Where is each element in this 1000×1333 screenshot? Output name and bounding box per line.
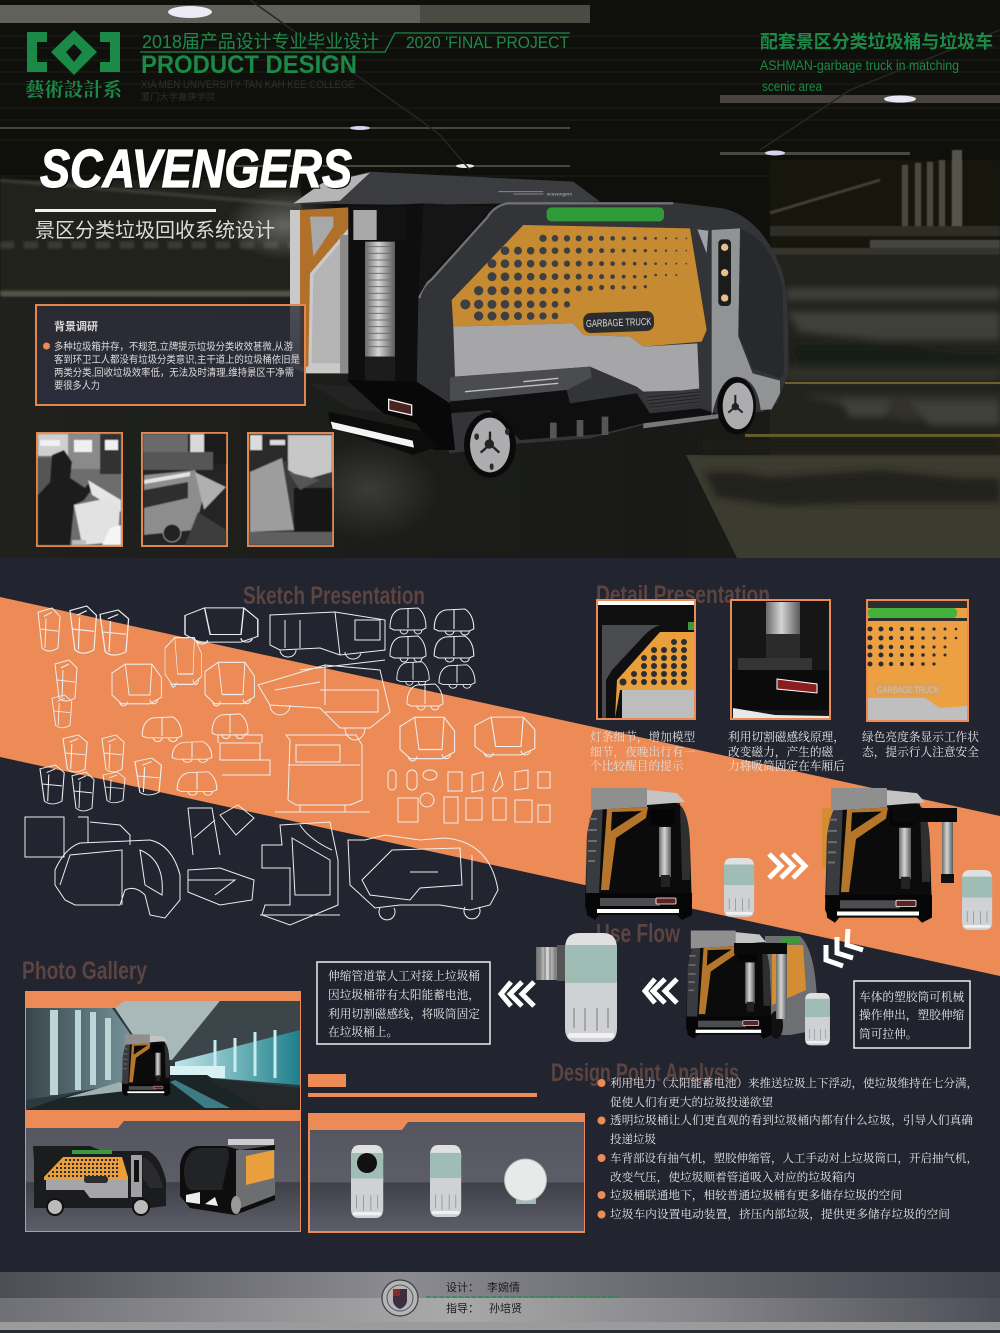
caption: magnetic tube detail <box>728 730 845 773</box>
header right: companion product title: 配套景区分类垃圾桶与垃圾车 <box>760 31 993 52</box>
panel: photo gallery <box>25 991 301 1232</box>
gallery photo: truck side and front views <box>26 1121 300 1231</box>
use flow step 1: truck and bin <box>585 788 754 920</box>
callout: plastic tube extends <box>854 981 970 1048</box>
main truck illustration: scavengers <box>547 191 573 197</box>
caption: light strip detail: 灯条细节，增加模型 <box>590 730 696 744</box>
arrow: to step 4 <box>645 979 677 1003</box>
photo: cart on street <box>142 433 227 546</box>
use flow step 4: bin with docked tube <box>536 933 617 1042</box>
caption: magnetic tube detail: 利用切割磁感线原理， <box>728 730 845 744</box>
heading: sketch presentation: Sketch Presentation <box>243 582 425 610</box>
header: course and project title: XIA MEN UNIVERSITY TAN KAH KEE COLLEGE <box>141 79 355 91</box>
panel: background research: 两类分类,回收垃圾效率低，无法及时清理,维持景区干净需 <box>54 366 294 379</box>
design points list <box>598 1076 978 1221</box>
detail image: light strip <box>597 600 695 719</box>
header: course and project title: 厦门大学嘉庚学院 <box>141 91 215 102</box>
caption: light strip detail: 个比较醒目的提示 <box>590 759 684 773</box>
arrow: to step 2 <box>769 854 805 878</box>
subtitle with rule <box>35 209 275 242</box>
callout: plastic tube extends: 车体的塑胶筒可机械 <box>859 990 965 1004</box>
callout: telescopic pipe docks: 伸缩管道靠人工对接上垃圾桶 <box>328 969 480 983</box>
hero background: underground car park <box>0 0 1000 558</box>
callout: telescopic pipe docks: 因垃圾桶带有太阳能蓄电池， <box>328 988 480 1002</box>
heading: use flow: Use Flow <box>596 918 681 948</box>
use flow step 3: truck docking bin <box>686 930 830 1045</box>
arrow: to step 3 <box>826 929 863 966</box>
footer credits: 设计： <box>446 1281 479 1294</box>
bin top view <box>504 1159 546 1204</box>
concept sketches <box>25 606 550 925</box>
heading: design point analysis: Design Point Analysis <box>551 1059 739 1087</box>
lower section background <box>0 558 1000 1272</box>
bin front view <box>351 1145 383 1218</box>
photo: sorted bins <box>248 433 333 546</box>
footer credits: 李婉倩 <box>487 1280 520 1294</box>
heading: detail presentation: Detail Presentation <box>596 581 770 609</box>
header: course and project title: 2020 'FINAL PROJECT <box>406 33 569 52</box>
decorative tab and rule above bin panel <box>308 1074 537 1097</box>
panel: background research: 要很多人力 <box>54 379 100 392</box>
bin back view <box>430 1145 461 1217</box>
panel: background research <box>36 305 305 405</box>
footer credits: 孙培贤 <box>489 1301 522 1315</box>
callout: plastic tube extends: 筒可拉伸。 <box>859 1027 917 1041</box>
header: course and project title: 2018届产品设计专业毕业设计 <box>142 31 379 52</box>
caption: green bar detail <box>862 730 979 759</box>
header: course and project title: PRODUCT DESIGN <box>141 51 357 79</box>
logo: art design department <box>25 30 123 101</box>
main truck illustration: GARBAGE TRUCK <box>586 317 652 330</box>
panel: background research: 多种垃圾箱并存，不规范,立牌提示垃圾分类收效甚微,从游 <box>54 340 293 353</box>
header right: companion product title: scenic area <box>762 79 822 94</box>
header right: companion product title <box>760 31 993 94</box>
caption: green bar detail: 态，提示行人注意安全 <box>862 745 979 759</box>
footer credits <box>426 1280 621 1315</box>
callout: telescopic pipe docks: 利用切割磁感线，将吸筒固定 <box>328 1007 480 1021</box>
header right: companion product title: ASHMAN-garbage truck in matching <box>760 58 959 73</box>
caption: magnetic tube detail: 力将吸筒固定在车厢后 <box>728 759 845 773</box>
school seal <box>382 1280 418 1316</box>
header: course and project title <box>140 31 570 102</box>
caption: light strip detail: 细节，夜晚出行有一 <box>590 745 696 759</box>
callout: plastic tube extends: 操作伸出，塑胶伸缩 <box>859 1008 965 1022</box>
detail image: magnetic tube <box>731 600 830 719</box>
design points list: 垃圾桶联通地下，相较普通垃圾桶有更多储存垃圾的空间 <box>610 1188 902 1202</box>
callout: telescopic pipe docks: 在垃圾桶上。 <box>328 1025 398 1039</box>
design points list: 改变气压，使垃圾顺着管道吸入对应的垃圾箱内 <box>610 1170 855 1184</box>
heading: photo gallery: Photo Gallery <box>22 957 147 985</box>
gallery photo: truck in tunnel <box>26 1001 300 1110</box>
title: SCAVENGERS: SCAVENGERS <box>40 139 352 199</box>
detail image: green status bar: GARBAGE TRUCK <box>877 685 939 695</box>
design points list: 促使人们有更大的垃圾投递欲望 <box>610 1095 774 1109</box>
design points list: 透明垃圾桶让人们更直观的看到垃圾桶内都有什么垃圾，引导人们真确 <box>610 1113 974 1127</box>
subtitle with rule: 景区分类垃圾回收系统设计 <box>35 219 275 242</box>
callout: telescopic pipe docks <box>317 962 490 1044</box>
design points list: 垃圾车内设置电动装置，挤压内部垃圾，提供更多储存垃圾的空间 <box>610 1207 950 1221</box>
caption: light strip detail <box>590 730 696 773</box>
detail image: green status bar <box>867 600 968 721</box>
footer bands <box>0 1272 1000 1333</box>
caption: green bar detail: 绿色亮度条显示工作状 <box>862 730 979 744</box>
panel: bin views <box>308 1113 585 1233</box>
photo: person at bin <box>37 433 122 546</box>
panel: background research: 客到环卫工人都没有垃圾分类意识,主干道上的垃圾桶依旧是 <box>54 353 300 366</box>
use flow step 2: arm extended <box>822 788 992 930</box>
design points list: 利用电力（太阳能蓄电池）来推送垃圾上下浮动，使垃圾维持在七分满， <box>610 1076 978 1090</box>
panel: background research: 背景调研 <box>54 319 98 333</box>
design points list: 车背部设有抽气机，塑胶伸缩管，人工手动对上垃圾筒口，开启抽气机， <box>610 1151 978 1165</box>
design points list: 投递垃圾 <box>610 1132 656 1146</box>
arrow: to callout <box>501 982 534 1006</box>
caption: magnetic tube detail: 改变磁力，产生的磁 <box>728 745 834 759</box>
logo: art design department: 藝術設計系 <box>25 78 123 101</box>
main truck illustration <box>290 172 788 478</box>
footer credits: 指导： <box>446 1301 479 1315</box>
